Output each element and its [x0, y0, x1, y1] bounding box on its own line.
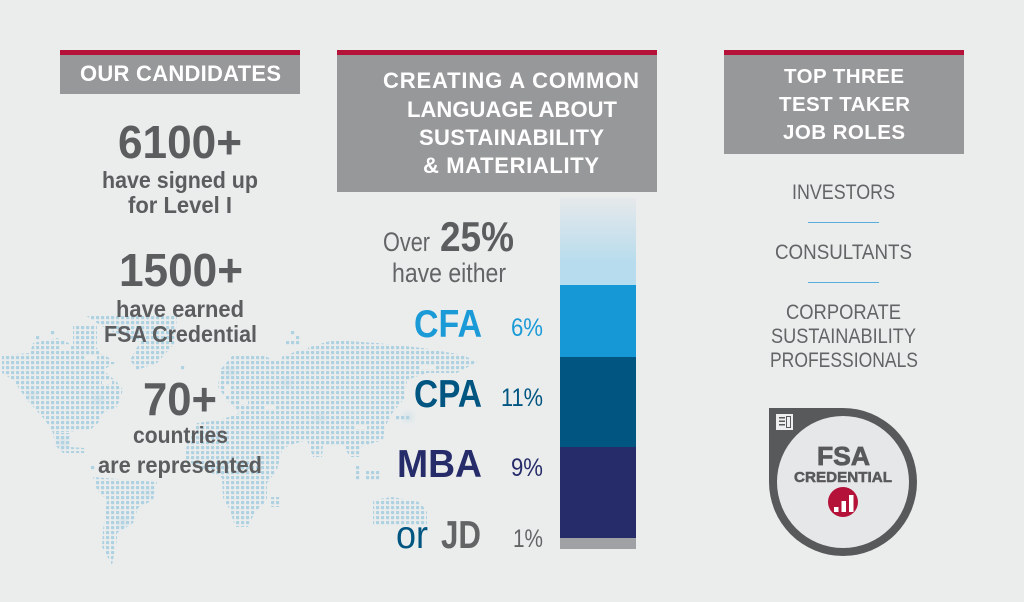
label: JD	[396, 514, 543, 557]
role: investors: INVESTORS	[792, 181, 895, 204]
role: corporate sustainability professionals: PROFESSIONALS	[770, 349, 918, 372]
label: CFA: CFA	[414, 303, 482, 346]
label: MBA	[397, 443, 543, 486]
stat: countries: 70+	[143, 373, 217, 425]
stat: countries: are represented	[98, 452, 262, 478]
stat: earned credential: FSA Credential	[104, 321, 257, 347]
map glows	[28, 367, 413, 527]
label: JD: JD	[441, 514, 481, 557]
stat: signed up: have signed up	[102, 167, 258, 193]
stat: earned credential: have earned	[116, 296, 244, 322]
heading: job roles	[724, 50, 964, 154]
panel: our candidates	[60, 50, 300, 478]
world map	[2, 315, 477, 565]
stat: signed up: for Level I	[128, 192, 232, 218]
panel: job roles	[724, 50, 964, 372]
label: CFA	[414, 303, 543, 346]
heading: common language	[337, 50, 657, 192]
heading: job roles: JOB ROLES	[783, 121, 905, 144]
stacked bar	[560, 198, 636, 549]
label: MBA: MBA	[397, 443, 482, 486]
role: corporate sustainability professionals	[770, 301, 918, 372]
stat: countries: countries	[133, 422, 228, 448]
stat: countries	[98, 373, 262, 478]
heading: job roles: TOP THREE	[784, 65, 904, 88]
intro text: Over	[383, 227, 430, 257]
label: CFA: 6%	[511, 314, 543, 342]
label: CPA: CPA	[414, 373, 482, 416]
intro text: have either	[392, 258, 506, 288]
role: corporate sustainability professionals: SUSTAINABILITY	[771, 325, 916, 348]
label: JD: 1%	[513, 525, 543, 553]
heading: common language: LANGUAGE ABOUT	[407, 97, 618, 122]
heading: our candidates	[60, 50, 300, 94]
icon: FSA credential badge: CREDENTIAL	[794, 470, 892, 486]
stat: earned credential: 1500+	[119, 244, 243, 296]
heading: common language: CREATING A COMMON	[383, 68, 639, 93]
label: CPA: 11%	[501, 384, 543, 412]
icon: FSA credential badge: FSA	[817, 441, 870, 471]
role: corporate sustainability professionals: CORPORATE	[786, 301, 901, 324]
label: MBA: 9%	[511, 454, 543, 482]
heading: common language: SUSTAINABILITY	[419, 125, 604, 150]
panel: common language	[337, 50, 657, 557]
stat: signed up	[102, 116, 258, 218]
map gaps	[60, 345, 435, 429]
intro text: 25%	[440, 213, 514, 260]
intro text	[383, 213, 514, 288]
icon: FSA credential badge	[769, 408, 917, 556]
label: CPA	[414, 373, 543, 416]
role: consultants: CONSULTANTS	[775, 241, 912, 264]
label: JD: or	[396, 514, 428, 557]
heading: job roles: TEST TAKER	[779, 93, 910, 116]
stat: signed up: 6100+	[118, 116, 242, 168]
heading: common language: & MATERIALITY	[423, 153, 599, 178]
heading: our candidates: OUR CANDIDATES	[80, 61, 281, 86]
stat: earned credential	[104, 244, 257, 347]
